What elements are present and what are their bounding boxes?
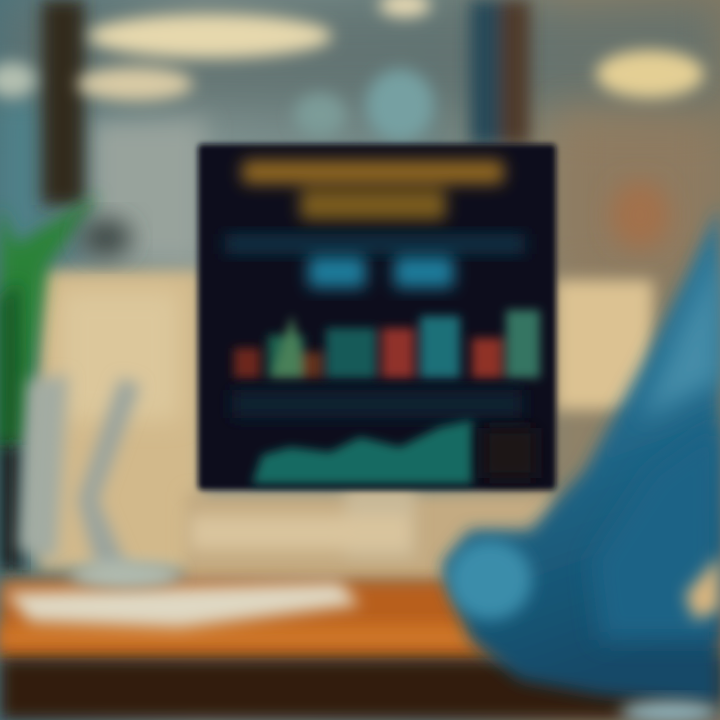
dashboard corner panel [484, 428, 536, 478]
monitor stand [190, 488, 415, 558]
lamps: glowing ceiling lights [0, 0, 704, 141]
pillars: dark wood columns [42, 0, 530, 205]
glass: transparent object [18, 375, 140, 580]
blurred base of glass [70, 561, 180, 589]
paper on the table [5, 582, 360, 628]
dashboard tiles [308, 256, 454, 288]
plant: green leaves [0, 194, 132, 570]
dashboard subtitle band [225, 234, 525, 254]
dashboard title [242, 160, 504, 220]
dashboard divider band [232, 390, 522, 418]
sleeve: blue shirt in foreground [442, 205, 720, 720]
wall: cream lower background [38, 270, 653, 582]
table: orange wooden desk [0, 580, 720, 720]
bar chart: coloured bars [234, 310, 540, 378]
monitor: dark dashboard screen [198, 144, 556, 490]
area chart: teal [252, 420, 472, 484]
